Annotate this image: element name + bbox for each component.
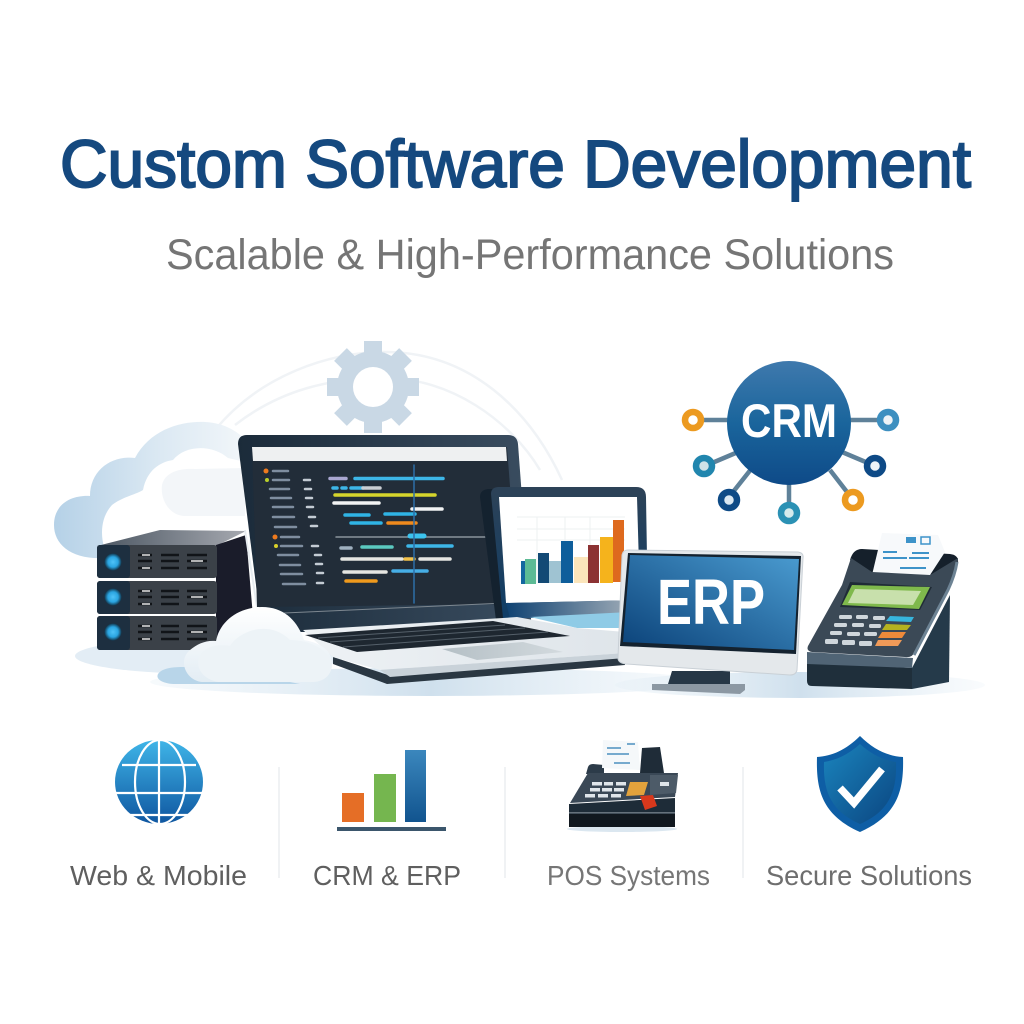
terminal top face (808, 558, 958, 657)
server rack (97, 530, 255, 650)
terminal side (912, 595, 950, 689)
printer hump (640, 747, 664, 773)
feature: crm and erp (313, 750, 461, 891)
erp monitor (618, 550, 803, 694)
tablet screen (499, 497, 640, 603)
server top face (97, 530, 246, 546)
monitor bezel (620, 553, 801, 654)
red card (640, 795, 657, 810)
label: Web & Mobile (70, 860, 247, 891)
crm globe (727, 361, 851, 485)
laptop screen (252, 447, 519, 607)
laptop base (303, 617, 625, 684)
icon: front cloud (157, 607, 332, 684)
deck (303, 617, 625, 670)
icon: pos machine (567, 740, 678, 832)
tablet back edge (480, 489, 510, 620)
label: Secure Solutions (766, 860, 972, 891)
keys (585, 782, 669, 798)
front silver strip (380, 653, 625, 677)
lid shell (238, 435, 532, 632)
icon: globe (115, 740, 203, 824)
receipt (872, 533, 945, 575)
bar chart (517, 517, 625, 584)
code editor lines (264, 465, 526, 603)
top face (570, 773, 678, 803)
server unit 3 (97, 616, 217, 650)
code window title bar (252, 447, 507, 461)
tablet with chart (480, 487, 648, 628)
server unit 1 (97, 545, 217, 578)
monitor frame (618, 550, 803, 675)
server unit 2 (97, 581, 217, 614)
feature: pos systems (547, 740, 710, 891)
lower body (569, 798, 675, 827)
ground shadows (75, 638, 985, 698)
title: Custom Software Development (60, 127, 971, 202)
terminal lip (807, 652, 913, 668)
right panel (650, 775, 678, 795)
terminal lower front (807, 662, 912, 689)
underside (333, 657, 625, 684)
icon: gear (327, 341, 419, 433)
icon: bar chart (337, 750, 446, 831)
erp label: ERP (657, 566, 765, 638)
subtitle: Scalable & High-Performance Solutions (166, 231, 894, 279)
monitor screen (623, 555, 799, 650)
feature: secure solutions (766, 736, 972, 891)
pos terminal (807, 533, 958, 689)
bottom bezel line (262, 603, 505, 614)
monitor base (652, 684, 745, 694)
label: POS Systems (547, 860, 710, 891)
icon: back cloud (54, 422, 250, 560)
lower reflection strip (506, 600, 640, 618)
hero illustration (54, 341, 985, 698)
monitor stand (668, 671, 730, 684)
divider (278, 767, 280, 878)
crm hub (685, 361, 896, 521)
orange pad (626, 782, 648, 796)
connectors (704, 420, 877, 503)
divider (742, 767, 744, 878)
keyboard (305, 621, 570, 652)
side highlight (914, 562, 957, 655)
divider (504, 767, 506, 878)
icon: shield (817, 736, 903, 832)
background arcs (215, 352, 562, 480)
shoulder (586, 764, 604, 774)
trackpad (442, 642, 563, 660)
crm nodes (685, 412, 896, 521)
terminal display (840, 582, 932, 610)
receipt (602, 740, 640, 770)
printer band (850, 549, 958, 575)
feature: web and mobile (70, 740, 247, 891)
lid edge highlight (245, 530, 257, 607)
server side (216, 535, 255, 650)
keypad (825, 615, 914, 646)
crm label: CRM (741, 394, 837, 447)
label: CRM & ERP (313, 860, 461, 891)
blue glow strip (530, 612, 630, 628)
tablet frame (491, 487, 648, 618)
laptop lid (238, 435, 532, 632)
